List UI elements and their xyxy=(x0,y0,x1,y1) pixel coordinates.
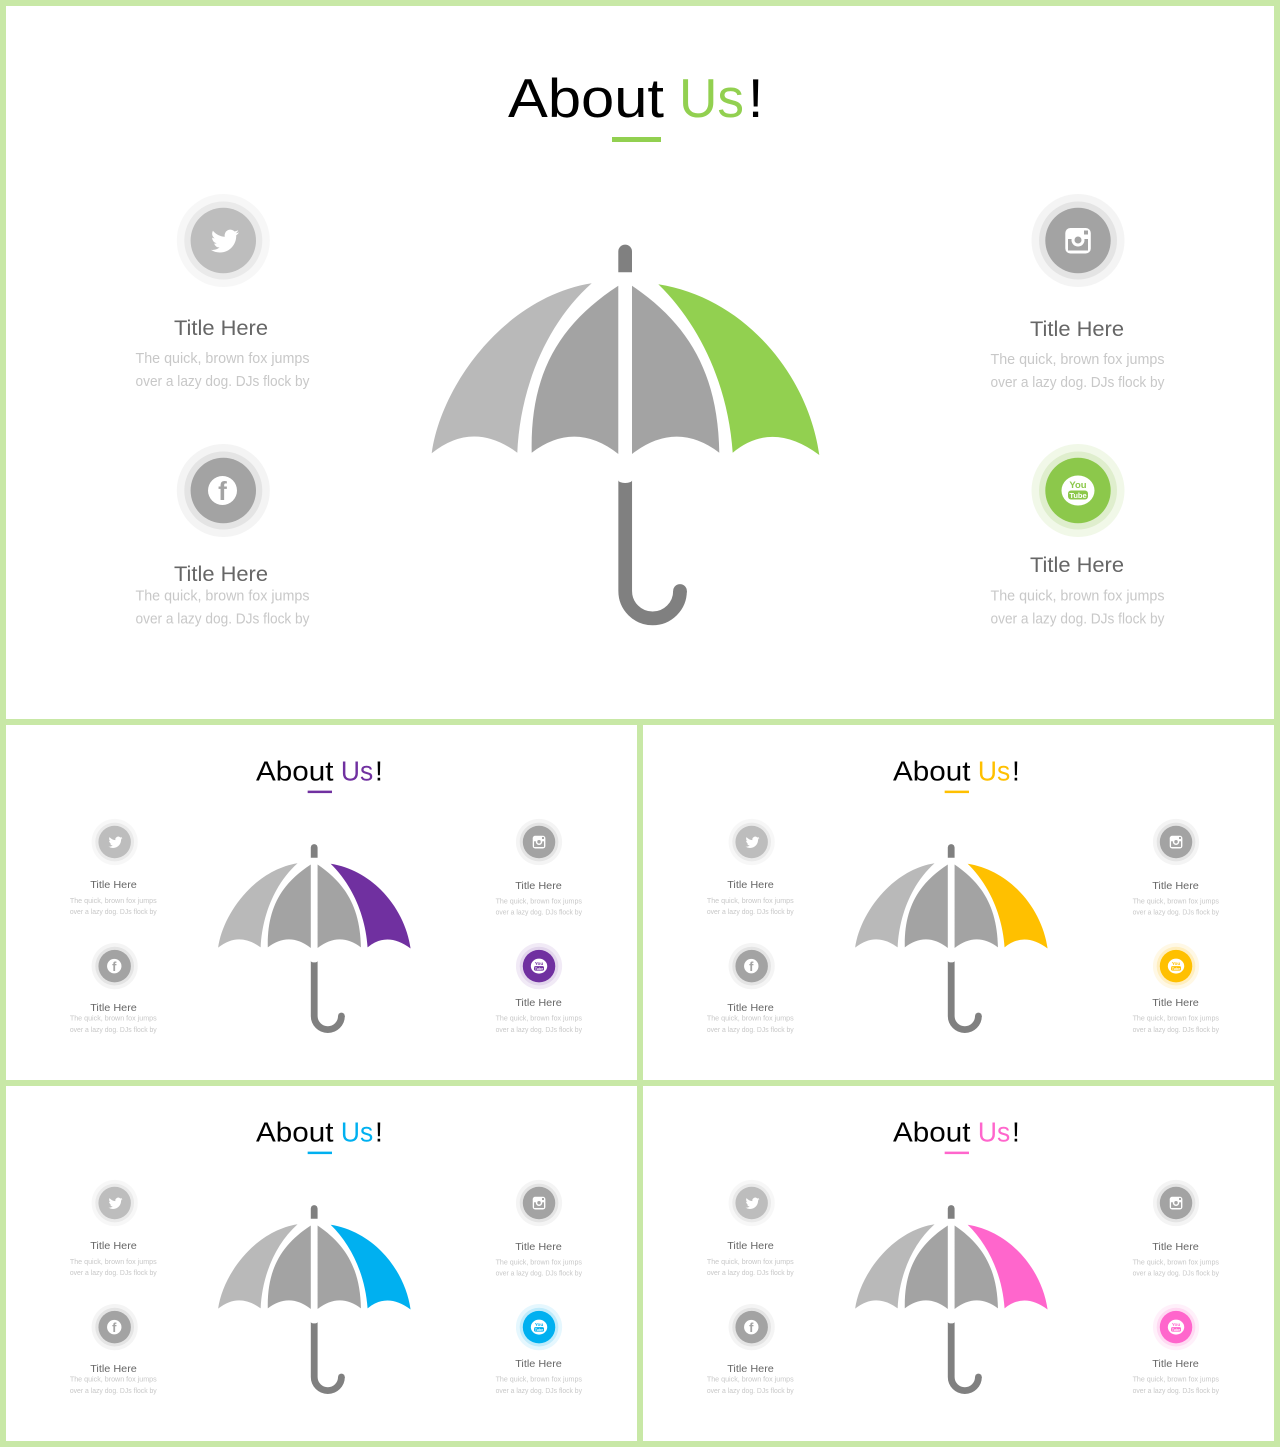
icon: twitter xyxy=(729,1180,775,1226)
text block: top right: over a lazy dog. DJs flock by xyxy=(990,374,1165,391)
icon: twitter xyxy=(177,194,270,287)
text block: top left: over a lazy dog. DJs flock by xyxy=(70,1268,157,1277)
text block: bottom right: Title Here xyxy=(1152,998,1199,1009)
title: Us xyxy=(978,756,1010,787)
title: ! xyxy=(375,756,383,787)
title xyxy=(893,756,1020,787)
text block: bottom right xyxy=(496,998,582,1034)
text block: top left: over a lazy dog. DJs flock by xyxy=(70,907,157,916)
icon: youtube: You xyxy=(1172,1322,1180,1327)
text block: bottom right: over a lazy dog. DJs flock by xyxy=(1133,1386,1219,1395)
text block: top right xyxy=(1133,881,1219,917)
title xyxy=(256,756,383,787)
text block: top right: over a lazy dog. DJs flock by xyxy=(496,1269,582,1278)
text block: top right xyxy=(990,318,1165,391)
panel: main green variant xyxy=(6,6,1274,719)
text block: bottom left: The quick, brown fox jumps xyxy=(707,1014,794,1023)
text block: bottom right: The quick, brown fox jumps xyxy=(496,1014,582,1023)
text block: top right: Title Here xyxy=(1152,881,1199,892)
icon: instagram xyxy=(1153,819,1199,865)
text block: bottom right: Title Here xyxy=(1152,1359,1199,1370)
text block: top left: Title Here xyxy=(727,880,774,891)
icon: youtube: You xyxy=(1172,961,1180,966)
text block: top left: The quick, brown fox jumps xyxy=(707,1257,794,1266)
text block: bottom left: over a lazy dog. DJs flock by xyxy=(70,1025,157,1034)
panel: gold variant xyxy=(643,725,1274,1080)
text block: bottom left: The quick, brown fox jumps xyxy=(707,1375,794,1384)
icon: facebook xyxy=(92,943,138,989)
icon: youtube xyxy=(516,943,562,989)
text block: top right xyxy=(1133,1242,1219,1278)
text block: bottom left xyxy=(70,1003,157,1034)
text block: bottom left xyxy=(707,1003,794,1034)
text block: bottom right xyxy=(1133,1359,1219,1395)
text block: top right: The quick, brown fox jumps xyxy=(1133,1257,1219,1266)
icon: youtube xyxy=(1153,1304,1199,1350)
text block: top left: The quick, brown fox jumps xyxy=(707,896,794,905)
title: ! xyxy=(375,1117,383,1148)
icon: youtube: You xyxy=(535,1322,543,1327)
text block: top right: Title Here xyxy=(515,881,562,892)
text block: bottom right: Title Here xyxy=(515,998,562,1009)
text block: top left: The quick, brown fox jumps xyxy=(70,896,157,905)
text block: top left: Title Here xyxy=(90,1241,137,1252)
panel: blue variant xyxy=(6,1086,637,1441)
title: Us xyxy=(978,1117,1010,1148)
title underline xyxy=(945,1152,969,1154)
text block: bottom left: over a lazy dog. DJs flock by xyxy=(707,1025,794,1034)
icon: umbrella xyxy=(432,245,819,618)
text block: bottom left: over a lazy dog. DJs flock by xyxy=(70,1386,157,1395)
text block: bottom left xyxy=(136,563,310,628)
text block: top left: over a lazy dog. DJs flock by xyxy=(707,907,794,916)
icon: instagram xyxy=(1153,1180,1199,1226)
text block: bottom right: The quick, brown fox jumps xyxy=(1133,1375,1219,1384)
text block: top right: over a lazy dog. DJs flock by xyxy=(1133,908,1219,917)
text block: bottom right: over a lazy dog. DJs flock by xyxy=(496,1025,582,1034)
icon: facebook xyxy=(177,444,270,537)
text block: top left: Title Here xyxy=(174,317,268,340)
text block: bottom left xyxy=(70,1364,157,1395)
text block: top right: The quick, brown fox jumps xyxy=(496,896,582,905)
icon: facebook: f xyxy=(749,959,754,974)
text block: bottom left: The quick, brown fox jumps xyxy=(136,588,310,604)
icon: youtube xyxy=(1153,943,1199,989)
icon: youtube: You xyxy=(1069,480,1087,491)
text block: bottom left: Title Here xyxy=(90,1364,137,1375)
text block: top left xyxy=(70,1241,157,1277)
icon: twitter xyxy=(729,819,775,865)
icon: youtube: Tube xyxy=(1172,967,1180,971)
title: Us xyxy=(341,756,373,787)
text block: bottom right: The quick, brown fox jumps xyxy=(496,1375,582,1384)
icon: youtube xyxy=(1032,444,1124,537)
text block: bottom right: over a lazy dog. DJs flock by xyxy=(990,610,1165,628)
icon: instagram xyxy=(516,819,562,865)
title underline xyxy=(308,1152,332,1154)
text block: top left: over a lazy dog. DJs flock by xyxy=(136,373,310,390)
text block: top right xyxy=(496,1242,582,1278)
text block: top left: Title Here xyxy=(90,880,137,891)
icon: umbrella xyxy=(218,844,411,1030)
text block: top left xyxy=(707,880,794,916)
icon: facebook: f xyxy=(112,1320,117,1335)
text block: bottom left: The quick, brown fox jumps xyxy=(70,1375,157,1384)
icon: facebook: f xyxy=(218,476,227,506)
text block: bottom right xyxy=(1133,998,1219,1034)
text block: top left xyxy=(70,880,157,916)
icon: youtube: Tube xyxy=(1069,491,1087,500)
title xyxy=(256,1117,383,1148)
text block: top right: over a lazy dog. DJs flock by xyxy=(1133,1269,1219,1278)
text block: bottom left: Title Here xyxy=(727,1003,774,1014)
icon: facebook: f xyxy=(749,1320,754,1335)
title: About xyxy=(508,67,664,129)
text block: top left: The quick, brown fox jumps xyxy=(70,1257,157,1266)
title: About xyxy=(256,1117,334,1148)
icon: twitter xyxy=(92,819,138,865)
title xyxy=(508,67,763,129)
text block: top right: Title Here xyxy=(1030,318,1124,341)
icon: youtube: Tube xyxy=(1172,1328,1180,1332)
text block: bottom left: Title Here xyxy=(90,1003,137,1014)
text block: top right: The quick, brown fox jumps xyxy=(990,351,1164,368)
text block: top left: Title Here xyxy=(727,1241,774,1252)
title: ! xyxy=(1012,1117,1020,1148)
text block: top right: The quick, brown fox jumps xyxy=(496,1257,582,1266)
title: Us xyxy=(679,67,744,129)
text block: top left: over a lazy dog. DJs flock by xyxy=(707,1268,794,1277)
icon: instagram xyxy=(516,1180,562,1226)
text block: bottom left xyxy=(707,1364,794,1395)
text block: bottom right: Title Here xyxy=(515,1359,562,1370)
title: About xyxy=(893,1117,971,1148)
icon: twitter xyxy=(92,1180,138,1226)
icon: facebook xyxy=(92,1304,138,1350)
icon: facebook xyxy=(729,1304,775,1350)
text block: top right: The quick, brown fox jumps xyxy=(1133,896,1219,905)
text block: top right: Title Here xyxy=(515,1242,562,1253)
title: ! xyxy=(748,67,763,129)
title xyxy=(893,1117,1020,1148)
text block: bottom left: over a lazy dog. DJs flock by xyxy=(707,1386,794,1395)
panel: purple variant xyxy=(6,725,637,1080)
icon: umbrella xyxy=(218,1205,411,1391)
title underline xyxy=(945,791,969,793)
text block: top right xyxy=(496,881,582,917)
text block: top left xyxy=(136,317,310,390)
icon: youtube: Tube xyxy=(535,1328,543,1332)
icon: instagram xyxy=(1032,194,1124,287)
text block: bottom right: Title Here xyxy=(1030,554,1124,577)
text block: bottom left: over a lazy dog. DJs flock by xyxy=(136,610,310,628)
text block: top left: The quick, brown fox jumps xyxy=(136,350,310,367)
title underline xyxy=(612,137,661,142)
icon: facebook: f xyxy=(112,959,117,974)
text block: bottom right xyxy=(496,1359,582,1395)
text block: bottom left: The quick, brown fox jumps xyxy=(70,1014,157,1023)
icon: umbrella xyxy=(855,1205,1048,1391)
panel: pink variant xyxy=(643,1086,1274,1441)
text block: top right: over a lazy dog. DJs flock by xyxy=(496,908,582,917)
icon: youtube xyxy=(516,1304,562,1350)
icon: facebook xyxy=(729,943,775,989)
text block: bottom right: over a lazy dog. DJs flock by xyxy=(496,1386,582,1395)
text block: top right: Title Here xyxy=(1152,1242,1199,1253)
text block: bottom right: The quick, brown fox jumps xyxy=(990,588,1164,604)
icon: umbrella xyxy=(855,844,1048,1030)
title: About xyxy=(893,756,971,787)
icon: youtube: You xyxy=(535,961,543,966)
text block: bottom left: Title Here xyxy=(727,1364,774,1375)
text block: bottom right: The quick, brown fox jumps xyxy=(1133,1014,1219,1023)
text block: bottom right: over a lazy dog. DJs flock by xyxy=(1133,1025,1219,1034)
title: About xyxy=(256,756,334,787)
text block: bottom left: Title Here xyxy=(174,563,268,586)
title underline xyxy=(308,791,332,793)
title: Us xyxy=(341,1117,373,1148)
text block: top left xyxy=(707,1241,794,1277)
title: ! xyxy=(1012,756,1020,787)
text block: bottom right xyxy=(990,554,1165,628)
icon: youtube: Tube xyxy=(535,967,543,971)
